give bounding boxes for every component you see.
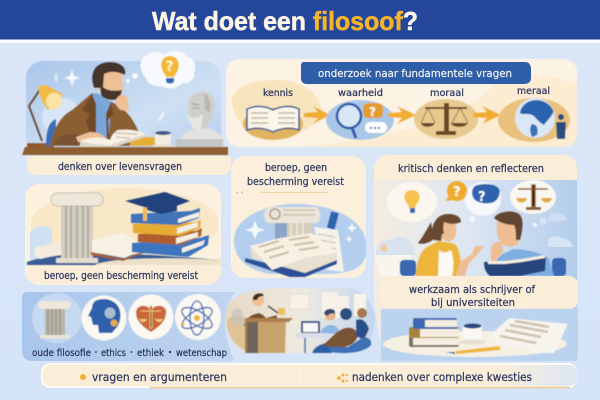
bottom bar: vragen en argumenteren (92, 370, 227, 384)
illustration: column and book (234, 204, 366, 277)
icon: book kennis (243, 106, 303, 140)
caption: werkzaam (379, 276, 578, 309)
arrow (304, 106, 330, 124)
bottom bar: nadenken over complexe kwesties (352, 370, 532, 384)
panel: beroep, geen bescherming vereist (center): beroep, geen (265, 162, 327, 174)
panel: kritisch denken en reflecteren: kritisch denken en reflecteren (398, 163, 544, 175)
panel: oude filosofie, ethics, ethiek, wetenschap: oude filosofie (32, 348, 91, 359)
title: Wat doet een filosoof? (152, 6, 418, 36)
icon: scales moraal (414, 99, 478, 139)
panel: oude filosofie, ethics, ethiek, wetenschap: ethics (101, 348, 126, 359)
label: meraal: meraal (517, 86, 550, 97)
panel: onderzoek naar fundamentele vragen (226, 59, 577, 147)
illustration: desk lamp (27, 85, 82, 149)
icon: globe meraal (498, 98, 570, 142)
label: moraal: moraal (430, 88, 464, 99)
icon: magnifier waarheid: ? (369, 105, 376, 119)
panel: beroep, geen bescherming vereist (center) (231, 156, 366, 278)
label: kennis: kennis (263, 88, 293, 99)
panel: oude filosofie, ethics, ethiek, wetenschap: wetenschap (176, 348, 227, 359)
arrow (473, 106, 501, 124)
illustration: coffee cup (151, 112, 175, 148)
illustration: stack of books with cap (125, 192, 209, 257)
label: waarheid: waarheid (338, 88, 383, 99)
illustration: thought bubbles (387, 180, 566, 227)
icon: atom (175, 294, 221, 340)
illustration: chair (46, 119, 56, 146)
header band (0, 0, 600, 43)
illustration: books, coffee, newspaper (381, 309, 578, 361)
illustration: bust (176, 92, 223, 147)
arrow (388, 106, 416, 124)
panel: oude filosofie, ethics, ethiek, wetenschap: ethiek (137, 348, 164, 359)
panel: beroep, geen bescherming vereist (center): bescherming vereist (247, 176, 344, 188)
icon: heart with scales (128, 294, 174, 340)
panel: kritisch denken en reflecteren (374, 155, 577, 361)
panel: presentation illustration (225, 288, 375, 353)
panel: oude filosofie, ethics, ethiek, wetenschap (22, 292, 235, 361)
banner (301, 62, 531, 84)
thought bubble: idea (126, 51, 195, 88)
icon: magnifier waarheid (326, 100, 394, 140)
caption: werkzaam: bij universiteiten (431, 297, 515, 309)
banner: onderzoek naar fundamentele vragen (318, 67, 512, 80)
caption: denken over levensvragen: denken over levensvragen (58, 160, 182, 173)
illustration: column (27, 193, 221, 265)
panel: beroep, geen bescherming vereist (left) (25, 184, 221, 285)
illustration: thought bubbles: ? (453, 185, 461, 200)
illustration: philosopher (50, 62, 141, 146)
icon: head with gear (82, 296, 126, 340)
panel: denken over levensvragen (22, 61, 228, 155)
icon: orange dots (337, 374, 348, 382)
bottom bar (41, 363, 577, 388)
panel: beroep, geen bescherming vereist (left): beroep, geen bescherming vereist (44, 269, 199, 282)
caption: werkzaam: werkzaam als schrijver of (409, 284, 535, 296)
icon: column (32, 293, 82, 343)
illustration: desk (22, 147, 228, 155)
icon: sparkles (54, 69, 80, 87)
caption: denken over levensvragen (27, 156, 231, 175)
thought bubble: idea: ? (166, 59, 174, 75)
illustration: two people talking (400, 211, 566, 276)
illustration: thought bubbles: ? (478, 190, 486, 205)
illustration: open book (80, 130, 155, 149)
